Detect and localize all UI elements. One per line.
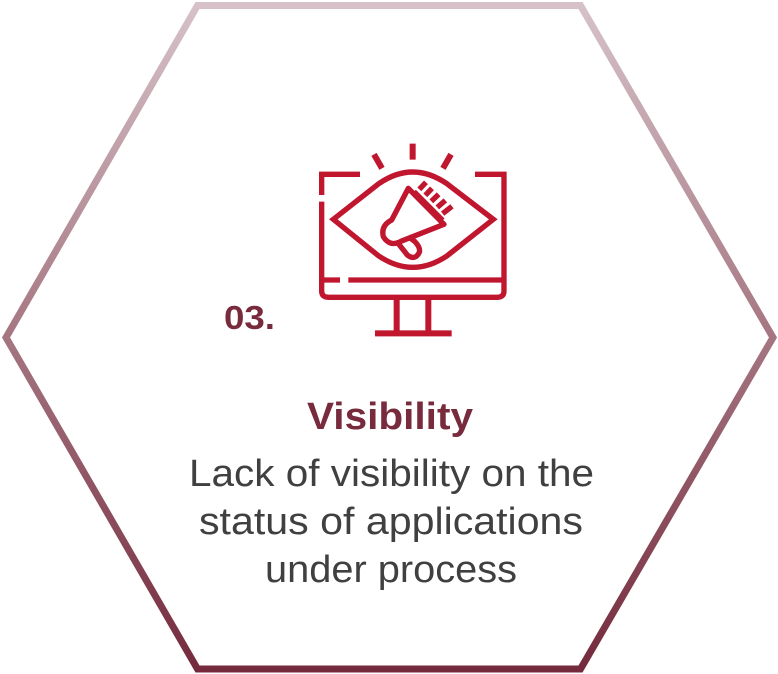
description text: under process [265,549,517,591]
icon: monitor with eye and megaphone [322,144,504,333]
icon: monitor screen [322,174,504,297]
icon: megaphone [383,182,452,257]
description text [189,453,594,591]
icon: attention rays [374,144,451,168]
icon: monitor stand [375,299,452,333]
heading: Visibility [307,396,473,438]
icon: eye [333,172,493,267]
step number: 03. [224,299,275,336]
description text: Lack of visibility on the [189,453,594,495]
description text: status of applications [199,501,583,543]
